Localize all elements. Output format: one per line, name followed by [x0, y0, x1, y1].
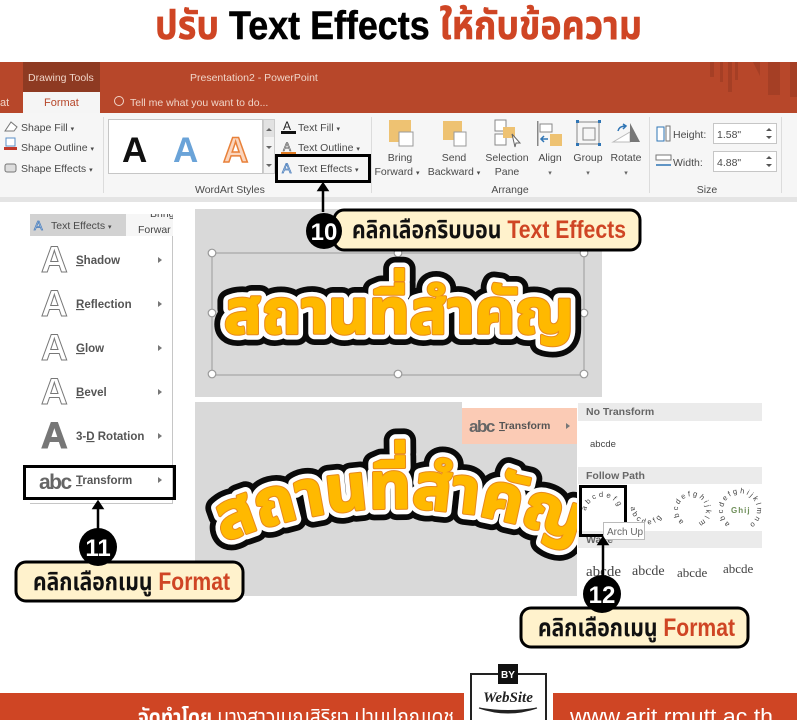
arrange labels: Pane: [495, 166, 519, 178]
menu item: bevel: [41, 371, 162, 412]
arrange labels: Group: [573, 152, 603, 164]
arrange labels: [375, 152, 642, 196]
wave section: abcde: [677, 565, 708, 580]
menu item: glow: A: [41, 327, 68, 368]
follow path section: abcdefg: [630, 507, 662, 524]
text fill / outline / effects commands: Text Fill ▾: [298, 122, 341, 134]
arrange labels: Selection: [485, 152, 529, 164]
wordart: arched text: สถานที่สำคัญ: [211, 434, 577, 556]
tell me box: Tell me what you want to do...: [130, 97, 268, 109]
text fill / outline / effects commands: A: [282, 160, 292, 176]
wordart: flat text: สถานที่สำคัญ: [224, 268, 574, 347]
arrange labels: Arrange: [491, 184, 529, 196]
badge: by website: WebSite: [483, 690, 533, 706]
callout 12: [521, 575, 748, 647]
highlight box on transform: [24, 466, 174, 498]
wordart: arched text: สถานที่สำคัญ: [205, 428, 577, 561]
no transform section: abcde: [590, 439, 616, 450]
menu item: glow: [41, 327, 162, 368]
menu item: reflection: A: [41, 283, 68, 324]
callout 12: 12: [589, 582, 615, 609]
arrange labels: ▾: [586, 170, 590, 177]
arrange labels: Align: [538, 152, 562, 164]
transform menu item highlighted: [462, 408, 577, 444]
arrange labels: ▾: [548, 170, 552, 177]
no transform section: [578, 403, 762, 450]
follow path section: abcdefg: [582, 492, 622, 510]
menu header: A: [34, 218, 43, 233]
wordart gallery: [108, 120, 274, 174]
menu item: shadow: A: [41, 239, 68, 280]
footer right band: [553, 693, 797, 720]
text fill / outline / effects commands: Text Effects ▾: [298, 163, 359, 175]
partial tab: at: [0, 97, 9, 109]
size controls: Size: [697, 184, 717, 196]
panel: transform gallery: [462, 402, 762, 596]
arrow: to arch up: [599, 538, 607, 578]
follow path section: abcdefghijklm: [674, 490, 712, 526]
menu body: [30, 236, 173, 504]
drawing tools tab: [23, 62, 100, 92]
menu item: 3-d rotation: A: [41, 415, 68, 456]
size controls: 4.88": [717, 157, 741, 169]
follow path section: [578, 467, 762, 526]
panel: text effects menu: Bring: [150, 208, 175, 220]
gallery background: [577, 402, 762, 596]
arrange labels: Send: [442, 152, 466, 164]
arrange icons: [389, 120, 640, 147]
panel: text effects menu: Forwar: [138, 224, 171, 236]
arrange labels: Forward ▾: [375, 166, 420, 178]
callout 10: 10: [311, 219, 337, 246]
menu item: bevel: A: [41, 371, 68, 412]
highlight box on text effects: [276, 156, 370, 182]
ribbon screenshot: [0, 62, 797, 202]
panel: arched text on gray: [195, 402, 577, 596]
wave section: Wave: [586, 534, 613, 546]
wave section: abcde: [632, 564, 665, 579]
menu item: bevel: Bevel: [76, 387, 107, 399]
wordart: arched text: สถานที่สำคัญ: [216, 438, 577, 551]
callout 11: คลิกเลือกเมนู Format: [33, 568, 231, 597]
menu item: transform: abc: [39, 471, 73, 494]
shape commands: Shape Effects ▾: [21, 163, 93, 175]
arrange labels: Backward ▾: [428, 166, 481, 178]
group label wordart: WordArt Styles: [195, 184, 265, 196]
menu item: reflection: Reflection: [76, 299, 132, 311]
wordart gallery: A: [173, 131, 198, 170]
panel: text effects menu: [24, 208, 175, 504]
format tab: [23, 92, 100, 113]
callout 11: [16, 528, 243, 601]
menu item: reflection: [41, 283, 162, 324]
panel: selected text on gray: [195, 209, 602, 397]
transform menu item highlighted: abc: [469, 417, 495, 436]
menu item: transform: Transform: [76, 475, 132, 487]
footer: [0, 664, 797, 720]
callout 11: 11: [85, 535, 111, 562]
callout 12: คลิกเลือกเมนู Format: [538, 614, 736, 643]
badge: by website: BY: [501, 670, 515, 681]
wordart gallery: A: [122, 131, 147, 170]
shape commands: Shape Outline ▾: [21, 142, 94, 154]
wordart: flat text: สถานที่สำคัญ: [224, 268, 574, 347]
ribbon body: [0, 113, 797, 197]
menu item: glow: Glow: [76, 343, 104, 355]
callout 10: [306, 210, 640, 250]
callout 10: คลิกเลือกริบบอน Text Effects: [352, 216, 626, 244]
arrange labels: Bring: [388, 152, 412, 164]
text fill / outline / effects commands: A: [283, 140, 291, 154]
menu header: [30, 214, 126, 236]
wordart: flat text: สถานที่สำคัญ: [224, 268, 574, 347]
badge: by website: [471, 664, 546, 720]
menu item: transform: [39, 471, 162, 494]
menu item: shadow: Shadow: [76, 255, 120, 267]
wordart: flat text: สถานที่สำคัญ: [224, 268, 574, 347]
arrange labels: Rotate: [611, 152, 642, 164]
follow path section: Ghij: [731, 506, 751, 515]
window title: Presentation2 - PowerPoint: [190, 72, 318, 84]
tooltip: [604, 522, 644, 540]
wordart gallery: A: [223, 131, 248, 170]
wave section: abcde: [586, 564, 621, 580]
text fill / outline / effects commands: A: [283, 119, 291, 133]
drawing tools tab: Drawing Tools: [28, 72, 94, 84]
menu item: shadow: [41, 239, 162, 280]
menu header: Text Effects ▾: [51, 220, 112, 232]
menu item: 3-d rotation: [41, 415, 162, 456]
arch up highlight box: [580, 486, 626, 536]
size controls: Height:: [673, 129, 706, 141]
footer left band: [0, 693, 464, 720]
format tab: Format: [44, 97, 79, 109]
text fill / outline / effects commands: [281, 119, 360, 176]
size controls: Width:: [673, 157, 703, 169]
shape commands: Shape Fill ▾: [21, 122, 75, 134]
arrange labels: ▾: [624, 170, 628, 177]
wordart: arched text: สถานที่สำคัญ: [216, 440, 577, 550]
text fill / outline / effects commands: Text Outline ▾: [298, 142, 360, 154]
follow path section: abcdefghijklmnop: [718, 488, 762, 526]
wave section: abcde: [723, 561, 754, 576]
arrow: to transform: [94, 502, 102, 532]
wave section: [578, 531, 762, 580]
follow path section: Follow Path: [586, 470, 645, 482]
ribbon decoration: [710, 62, 797, 97]
transform menu item highlighted: Transform: [499, 420, 550, 432]
tooltip: Arch Up: [607, 527, 644, 538]
no transform section: No Transform: [586, 406, 654, 418]
menu item: 3-d rotation: 3-D Rotation: [76, 431, 144, 443]
size controls: [656, 124, 776, 196]
selection frame: [208, 249, 588, 378]
size controls: 1.58": [717, 129, 741, 141]
title: ปรับ Text Effects ให้กับข้อความ: [155, 3, 642, 48]
shape commands: [4, 122, 94, 175]
arrow: to text effects: [319, 184, 327, 212]
ribbon title bar: [0, 62, 797, 113]
